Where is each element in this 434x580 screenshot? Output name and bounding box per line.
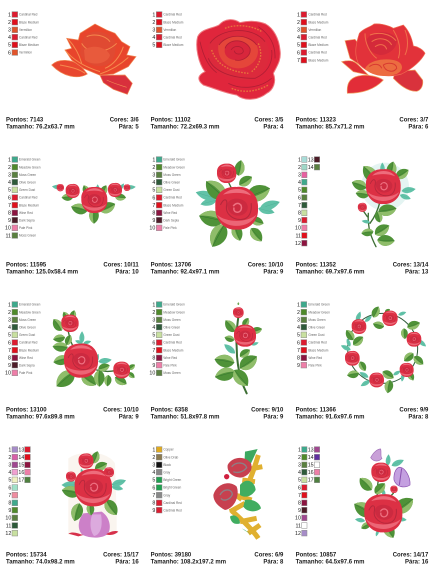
color legend: 16 — [18, 470, 24, 476]
color legend: Meadow Green — [163, 165, 185, 169]
color legend: 6 — [298, 485, 301, 491]
stats: Cores: 3/7 — [399, 118, 429, 124]
color legend: Green Dust — [19, 188, 35, 192]
color legend: Meadow Green — [19, 165, 41, 169]
color legend: 7 — [298, 493, 301, 499]
color legend: Cardinal Red — [163, 508, 182, 512]
color legend: 3 — [152, 463, 155, 469]
stats: Cores: 6/9 — [254, 553, 284, 559]
panel: design 7 — [5, 302, 139, 420]
stats: Pontos: 39180 — [151, 553, 192, 559]
color legend: 1 — [297, 302, 300, 308]
stats: Pára: 9 — [263, 414, 284, 420]
stats — [151, 408, 284, 420]
color legend: 5 — [152, 478, 155, 484]
color legend: 1 — [152, 12, 155, 18]
panel: design 3 — [296, 12, 429, 130]
color legend: Dark Sepia — [19, 363, 35, 367]
stats: Cores: 10/11 — [103, 263, 139, 269]
color legend — [5, 302, 41, 377]
embroidery: corner rose spray — [50, 310, 136, 392]
color legend: 9 — [152, 218, 155, 224]
color legend: 5 — [8, 188, 11, 194]
color legend: Blaze Medium — [163, 43, 184, 47]
embroidery: long-stem rose with watercolor halo — [350, 161, 416, 247]
color legend: Olive Green — [308, 325, 325, 329]
embroidery: red lotus rose — [342, 24, 425, 93]
color legend: Blaze Medium — [19, 20, 39, 24]
color legend: 2 — [8, 20, 11, 26]
color legend: 11 — [6, 523, 11, 529]
color legend — [295, 447, 320, 537]
color legend: Cardinal Red — [308, 35, 327, 39]
color legend: Green Dust — [308, 333, 325, 337]
color legend: Blaze Medium — [19, 348, 39, 352]
color legend: Wine Red — [163, 356, 177, 360]
color legend: Blaze Medium — [163, 203, 184, 207]
color legend: 6 — [152, 340, 155, 346]
color legend: 16 — [308, 470, 314, 476]
color legend: Cardinal Red — [19, 35, 38, 39]
stats: Pontos: 11323 — [296, 118, 337, 124]
color legend: 1 — [8, 447, 11, 453]
color legend: 7 — [152, 493, 155, 499]
stats: Pontos: 15734 — [6, 553, 47, 559]
color legend: 14 — [308, 165, 314, 171]
color legend: 10 — [295, 516, 301, 522]
color legend: 11 — [295, 523, 301, 529]
color legend: 3 — [297, 318, 300, 324]
color legend: Blaze Medium — [308, 43, 329, 47]
color legend: 2 — [8, 310, 11, 316]
color legend: Blaze Medium — [163, 20, 184, 24]
color legend: 7 — [8, 203, 11, 209]
color legend: Meadow Green — [308, 310, 330, 314]
stats: Cores: 15/17 — [103, 553, 139, 559]
color legend: 12 — [295, 531, 301, 537]
embroidery: roses on gold lattice — [213, 449, 262, 538]
color legend: 5 — [297, 333, 300, 339]
color legend: 9 — [298, 508, 301, 514]
stats: Pára: 9 — [263, 269, 284, 275]
color legend: Cardinal Red — [163, 196, 182, 200]
color legend: 7 — [8, 493, 11, 499]
color legend: 3 — [152, 28, 155, 34]
color legend: 9 — [8, 363, 11, 369]
color legend: Blaze Medium — [308, 20, 329, 24]
stats: Pontos: 11366 — [296, 408, 337, 414]
color legend: 13 — [308, 157, 314, 163]
color legend: Moss Green — [19, 234, 36, 238]
color legend: 6 — [8, 340, 11, 346]
stats: Cores: 3/6 — [110, 118, 139, 124]
color legend: 10 — [295, 226, 301, 232]
color legend: 4 — [297, 325, 300, 331]
stats: Pára: 10 — [115, 269, 139, 275]
color legend: 14 — [308, 455, 314, 461]
embroidery: roses in a vase — [61, 450, 127, 538]
panel: design 1 — [6, 12, 139, 130]
color legend: Black — [163, 463, 171, 467]
color legend: Green Dust — [163, 188, 180, 192]
color legend: 6 — [8, 485, 11, 491]
color legend: 7 — [297, 58, 300, 64]
stats: Pontos: 11595 — [6, 263, 47, 269]
color legend: Pale Pink — [19, 226, 33, 230]
color legend: Dark Sepia — [19, 218, 35, 222]
panel: design 6 — [295, 157, 429, 275]
color legend: 8 — [152, 211, 155, 217]
panel: design 2 — [151, 12, 284, 130]
color legend: Olive Green — [163, 180, 180, 184]
color legend: Moss Green — [163, 318, 181, 322]
color legend: Blaze Medium — [19, 43, 39, 47]
color legend: 4 — [298, 470, 301, 476]
panel: design 10 — [5, 447, 139, 565]
color legend: Olive Green — [19, 180, 36, 184]
panel: design 8 — [149, 302, 284, 420]
color legend: Copper — [163, 448, 174, 452]
color legend: Olive Drab — [163, 455, 178, 459]
color legend: 10 — [5, 371, 11, 377]
stats: Tamanho: 92.4x97.1 mm — [151, 269, 219, 275]
stats — [296, 553, 429, 565]
color legend: Wine Red — [308, 356, 322, 360]
color legend — [5, 447, 30, 537]
color legend: 2 — [298, 455, 301, 461]
color legend: 17 — [308, 478, 314, 484]
color legend: 10 — [149, 371, 155, 377]
color legend: 17 — [18, 478, 24, 484]
stats: Cores: 3/5 — [254, 118, 284, 124]
color legend: 10 — [5, 516, 11, 522]
color legend: 10 — [149, 226, 155, 232]
color legend: 8 — [8, 501, 11, 507]
color legend: 1 — [152, 302, 155, 308]
color legend: 6 — [8, 195, 11, 201]
color legend: Gray — [163, 470, 171, 474]
color legend — [5, 157, 41, 239]
color legend: 2 — [152, 165, 155, 171]
embroidery: rose with butterflies — [351, 449, 417, 540]
stats — [6, 263, 139, 275]
color legend: 1 — [298, 157, 301, 163]
color legend: 1 — [8, 302, 11, 308]
color legend: Dark Sepia — [163, 218, 179, 222]
stats: Pontos: 13706 — [151, 263, 192, 269]
color legend: 2 — [152, 20, 155, 26]
embroidery: orange rose — [52, 24, 136, 94]
color legend: 9 — [297, 363, 300, 369]
stats: Tamanho: 69.7x97.6 mm — [296, 269, 364, 275]
color legend: 12 — [295, 241, 301, 247]
stats: Tamanho: 76.2x63.7 mm — [6, 124, 75, 130]
color legend: 5 — [152, 43, 155, 49]
color legend: 7 — [152, 203, 155, 209]
stats: Pára: 16 — [115, 559, 139, 565]
panel: design 12 — [295, 447, 429, 565]
color legend: 4 — [152, 180, 155, 186]
color legend: 4 — [8, 180, 11, 186]
stats — [296, 263, 429, 275]
color legend: Pale Pink — [163, 226, 177, 230]
color legend: 8 — [298, 501, 301, 507]
stats: Pára: 4 — [263, 124, 284, 130]
color legend: Olive Green — [19, 325, 36, 329]
color legend: 7 — [8, 348, 11, 354]
color legend: 11 — [5, 233, 11, 239]
color legend: 1 — [8, 12, 11, 18]
color legend: Emerald Green — [308, 303, 330, 307]
stats: Tamanho: 74.0x98.2 mm — [6, 559, 75, 565]
color legend: 8 — [8, 211, 11, 217]
color legend: 5 — [8, 333, 11, 339]
color legend: 3 — [8, 173, 11, 179]
color legend — [149, 302, 185, 377]
stats: Tamanho: 85.7x71.2 mm — [296, 124, 364, 130]
color legend: Wine Red — [163, 211, 177, 215]
color legend: Pale Pink — [163, 363, 177, 367]
stats: Pára: 8 — [263, 559, 284, 565]
color legend: Cardinal Red — [19, 196, 38, 200]
color legend: 6 — [297, 50, 300, 56]
panel: design 9 — [296, 302, 429, 420]
color legend: Bright Green — [163, 486, 181, 490]
color legend: Blaze Medium — [163, 348, 184, 352]
panel: design 5 — [149, 157, 284, 275]
color legend: 11 — [295, 233, 301, 239]
color legend: Moss Green — [19, 173, 36, 177]
color legend: 3 — [8, 463, 11, 469]
stats — [151, 553, 284, 565]
color legend: 9 — [152, 363, 155, 369]
stats: Pára: 16 — [405, 559, 429, 565]
color legend: 4 — [8, 35, 11, 41]
stats: Tamanho: 108.2x197.2 mm — [151, 559, 226, 565]
color legend: Cardinal Red — [163, 13, 182, 17]
color legend: Vermilion — [19, 51, 32, 55]
color legend: 5 — [152, 333, 155, 339]
stats: Pontos: 10857 — [296, 553, 337, 559]
color legend: 5 — [298, 188, 301, 194]
color legend: 7 — [298, 203, 301, 209]
color legend: 6 — [298, 195, 301, 201]
stats: Pontos: 11352 — [296, 263, 337, 269]
color legend: Moss Green — [163, 371, 181, 375]
color legend: 13 — [18, 447, 24, 453]
color legend: 2 — [8, 455, 11, 461]
color legend: Cardinal Red — [308, 341, 327, 345]
color legend: 8 — [297, 356, 300, 362]
color legend: 1 — [152, 157, 155, 163]
color legend: 1 — [298, 447, 301, 453]
stats — [6, 408, 139, 420]
color legend: Moss Green — [19, 318, 36, 322]
embroidery: rose garland triangle — [52, 182, 136, 224]
color legend: 9 — [8, 218, 11, 224]
color legend: 9 — [298, 218, 301, 224]
color legend: 5 — [297, 43, 300, 49]
color legend: 5 — [152, 188, 155, 194]
stats — [151, 118, 284, 130]
color legend: 4 — [8, 325, 11, 331]
stats: Cores: 10/10 — [103, 408, 139, 414]
color legend: 4 — [8, 470, 11, 476]
color legend: Cardinal Red — [163, 501, 182, 505]
color legend: 14 — [18, 455, 24, 461]
color legend: 1 — [8, 157, 11, 163]
color legend: Gray — [163, 493, 171, 497]
color legend: Vermilion — [163, 28, 177, 32]
color legend: 5 — [8, 43, 11, 49]
stats: Cores: 14/17 — [393, 553, 429, 559]
color legend: Cardinal Red — [19, 341, 38, 345]
color legend — [152, 447, 182, 514]
color legend: 5 — [298, 478, 301, 484]
color legend: 9 — [152, 508, 155, 514]
stats — [296, 408, 429, 420]
color legend: 1 — [297, 12, 300, 18]
color legend: 2 — [152, 310, 155, 316]
color legend: 2 — [298, 165, 301, 171]
color legend: 6 — [152, 195, 155, 201]
color legend: 2 — [297, 20, 300, 26]
color legend: 4 — [298, 180, 301, 186]
stats: Pontos: 6358 — [151, 408, 189, 414]
color legend: Green Dust — [19, 333, 35, 337]
color legend: 8 — [152, 356, 155, 362]
color legend: 6 — [152, 485, 155, 491]
color legend: Cardinal Red — [163, 35, 182, 39]
stats: Pára: 13 — [405, 269, 429, 275]
color legend: 8 — [8, 356, 11, 362]
color legend: 8 — [152, 501, 155, 507]
stats — [6, 553, 139, 565]
color legend: 9 — [8, 508, 11, 514]
color legend: Emerald Green — [19, 303, 41, 307]
color legend: Meadow Green — [19, 310, 41, 314]
color legend: 7 — [297, 348, 300, 354]
embroidery: single-stem rose — [213, 302, 263, 393]
color legend: 10 — [5, 226, 11, 232]
color legend — [149, 157, 185, 232]
color legend: Wine Red — [19, 356, 33, 360]
color legend: 3 — [298, 173, 301, 179]
panel: design 4 — [5, 157, 139, 275]
color legend: Blaze Medium — [308, 58, 329, 62]
color legend: 4 — [297, 35, 300, 41]
color legend: Cardinal Red — [308, 51, 327, 55]
color legend: 6 — [297, 340, 300, 346]
stats: Tamanho: 97.6x89.8 mm — [6, 414, 75, 420]
stats: Tamanho: 125.0x58.4 mm — [6, 269, 78, 275]
color legend: Emerald Green — [19, 158, 41, 162]
color legend: 2 — [8, 165, 11, 171]
stats: Tamanho: 72.2x69.3 mm — [151, 124, 219, 130]
stats: Pontos: 11102 — [151, 118, 191, 124]
stats: Pára: 6 — [408, 124, 429, 130]
color legend: Vermilion — [308, 28, 322, 32]
stats — [296, 118, 429, 130]
color legend: Blaze Medium — [19, 203, 39, 207]
color legend: 12 — [5, 531, 11, 537]
stats: Tamanho: 64.5x97.6 mm — [296, 559, 364, 565]
color legend — [295, 157, 320, 247]
panel: design 11 — [151, 447, 284, 565]
color legend: Pale Pink — [308, 363, 322, 367]
color legend: 8 — [298, 211, 301, 217]
color legend: 3 — [152, 173, 155, 179]
color legend: 7 — [152, 348, 155, 354]
stats: Tamanho: 91.6x97.6 mm — [296, 414, 364, 420]
color legend: 4 — [152, 325, 155, 331]
color legend: 4 — [152, 35, 155, 41]
color legend: 3 — [152, 318, 155, 324]
color legend: Vermilion — [19, 28, 32, 32]
color legend: 6 — [8, 50, 11, 56]
color legend: Moss Green — [308, 318, 326, 322]
color legend: 3 — [8, 28, 11, 34]
embroidery: crimson rose — [197, 20, 280, 99]
color legend: Pale Pink — [19, 371, 33, 375]
stats: Pára: 9 — [119, 414, 139, 420]
stats — [6, 118, 139, 130]
color legend — [297, 12, 329, 64]
color legend — [152, 12, 184, 49]
color legend: 1 — [152, 447, 155, 453]
color legend — [297, 302, 330, 369]
color legend: Wine Red — [19, 211, 33, 215]
stats: Pára: 8 — [408, 414, 429, 420]
color legend: 15 — [18, 463, 24, 469]
embroidery: rose wreath — [340, 305, 427, 394]
color legend: 3 — [8, 318, 11, 324]
color legend: 2 — [297, 310, 300, 316]
color legend: Green Dust — [163, 333, 180, 337]
stats: Tamanho: 51.8x97.8 mm — [151, 414, 219, 420]
color legend: 4 — [152, 470, 155, 476]
color legend: 3 — [297, 28, 300, 34]
stats: Pontos: 7143 — [6, 118, 44, 124]
color legend: Cardinal Red — [163, 341, 182, 345]
color legend: Emerald Green — [163, 303, 185, 307]
color legend — [8, 12, 39, 56]
stats: Cores: 10/10 — [248, 263, 284, 269]
stats — [151, 263, 284, 275]
color legend: Olive Green — [163, 325, 180, 329]
stats: Pontos: 13100 — [6, 408, 47, 414]
embroidery: rose with bud and leaves — [195, 159, 281, 250]
color legend: Cardinal Red — [308, 13, 327, 17]
stats: Pára: 5 — [119, 124, 139, 130]
color legend: 2 — [152, 455, 155, 461]
color legend: Meadow Green — [163, 310, 185, 314]
stats: Cores: 9/9 — [399, 408, 429, 414]
stats: Cores: 13/14 — [393, 263, 429, 269]
color legend: Emerald Green — [163, 158, 185, 162]
stats: Cores: 9/10 — [251, 408, 284, 414]
color legend: 3 — [298, 463, 301, 469]
color legend: Cardinal Red — [19, 13, 38, 17]
color legend: Bright Green — [163, 478, 181, 482]
color legend: 13 — [308, 447, 314, 453]
color legend: Moss Green — [163, 173, 181, 177]
color legend: Blaze Medium — [308, 348, 329, 352]
color legend: 5 — [8, 478, 11, 484]
color legend: 15 — [308, 463, 314, 469]
